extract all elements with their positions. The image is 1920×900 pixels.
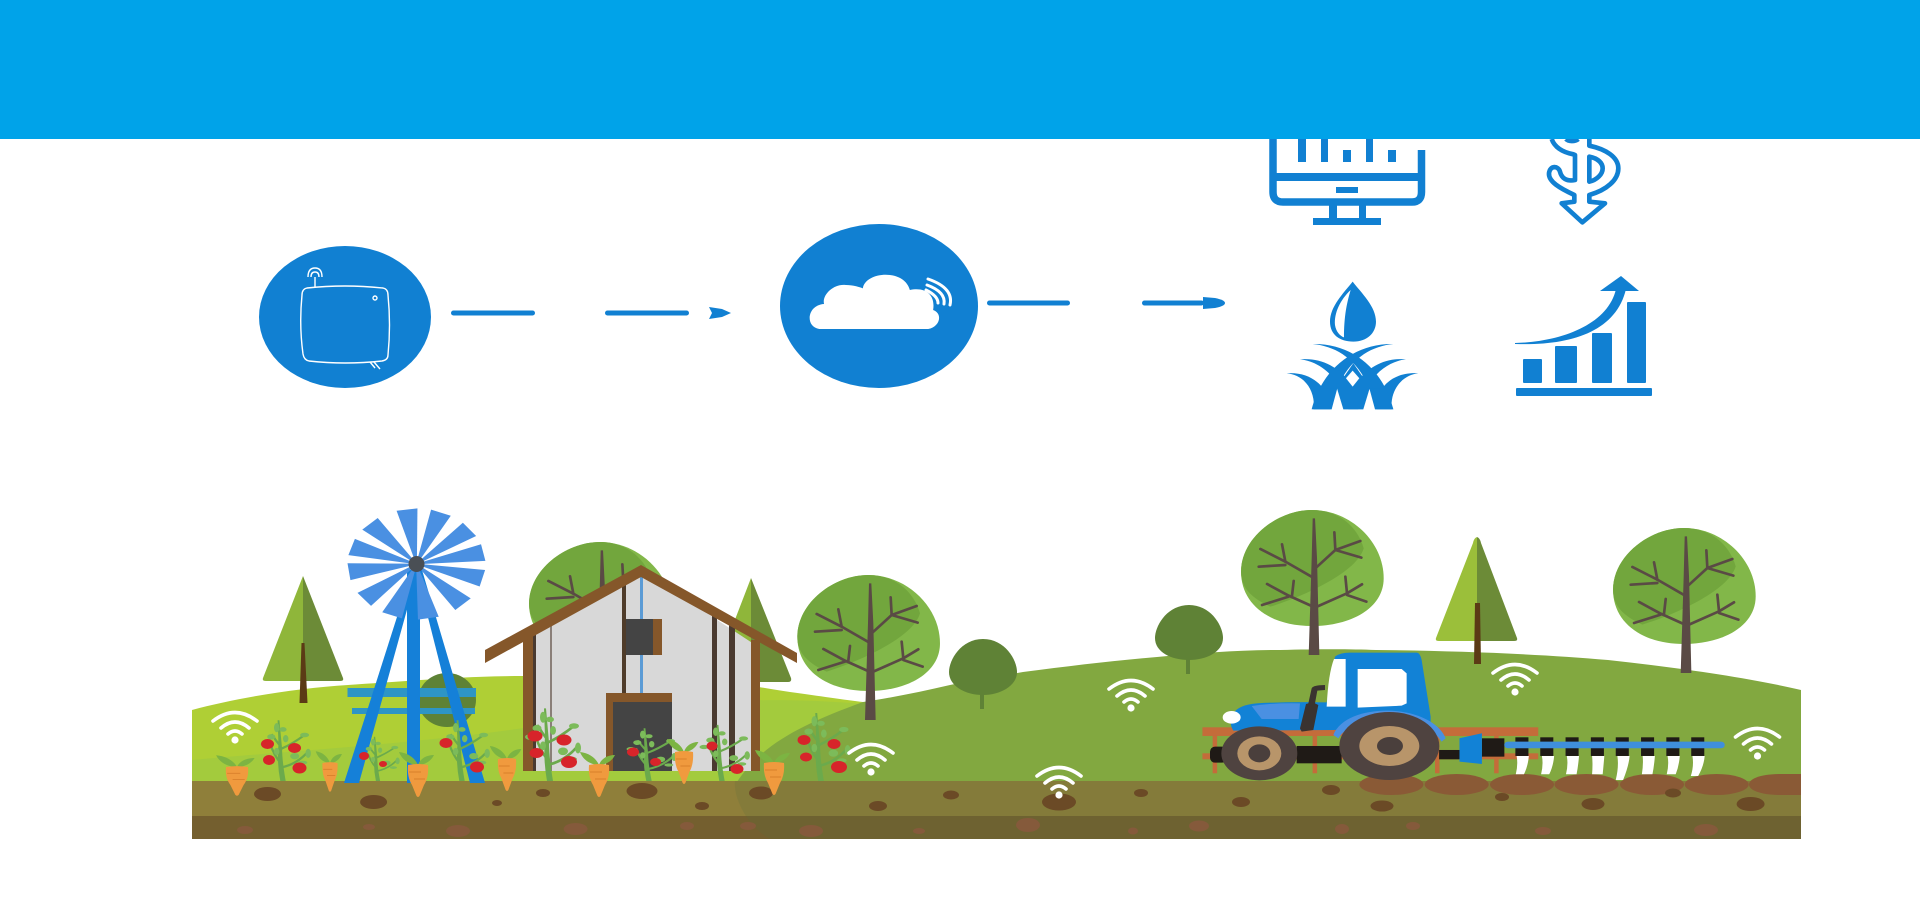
carrots [216,739,790,797]
tractor headlight [1223,711,1241,724]
tree: far right [1613,528,1756,673]
ground: lower soil [192,816,1801,839]
tomatoes [261,730,847,774]
tractor implement [1439,733,1725,780]
tractor [1210,653,1446,780]
tree: small dark centre [949,639,1017,709]
windmill bench [348,688,476,714]
tractor body [1231,653,1431,731]
windmill [344,508,485,783]
house [485,565,797,771]
hill: light green [192,676,880,790]
house wall [523,570,760,771]
icon: dollar with down arrow [1549,139,1618,222]
header band [0,0,1920,139]
tree: big centre [797,575,940,720]
tractor front wheel [1221,726,1297,780]
tractor exhaust [1300,685,1325,732]
tractor fence and implement [1202,727,1725,780]
tree: small dark right [1155,605,1223,674]
arrow: cloud to benefits [987,297,1225,309]
pine tree: behind house [711,578,791,682]
pine tree: left [263,576,343,703]
tractor fence [1202,727,1538,773]
tree: behind house [529,542,672,687]
windmill bush [418,673,476,727]
ground: right shade [735,781,1801,839]
hill: dark green [735,649,1801,790]
icon: sensor device in circle [259,246,431,388]
icon: cloud with signal in circle [780,224,978,388]
house posts [523,575,760,771]
house window [626,619,662,655]
soil reddish spots [237,818,1718,837]
tractor hood highlight [1252,703,1300,719]
windmill blades [347,508,485,620]
tractor axle [1210,746,1342,763]
ground: upper soil [192,781,1801,816]
process flow: sensor to cloud to benefits [259,139,1652,409]
tractor rear wheel [1339,712,1439,780]
house roof [485,565,797,663]
soil stones [254,783,1765,812]
windmill legs [344,570,485,783]
icon: monitor with bars [1273,139,1422,225]
farm scene [192,508,1801,839]
tomato plants [260,708,850,781]
arrow: sensor to cloud [451,307,731,319]
windmill hub [408,556,424,572]
wifi signal icons [213,664,1780,799]
tractor cab windows [1327,659,1407,708]
house door [606,693,672,771]
tree: right of centre [1241,510,1384,655]
tractor fender [1333,711,1446,742]
hill: light green lower shade [192,700,863,790]
soil furrows [1359,774,1801,801]
icon: water drop over grass [1287,282,1418,409]
pine tree: right [1436,537,1517,664]
icon: growth bar chart [1515,276,1652,396]
